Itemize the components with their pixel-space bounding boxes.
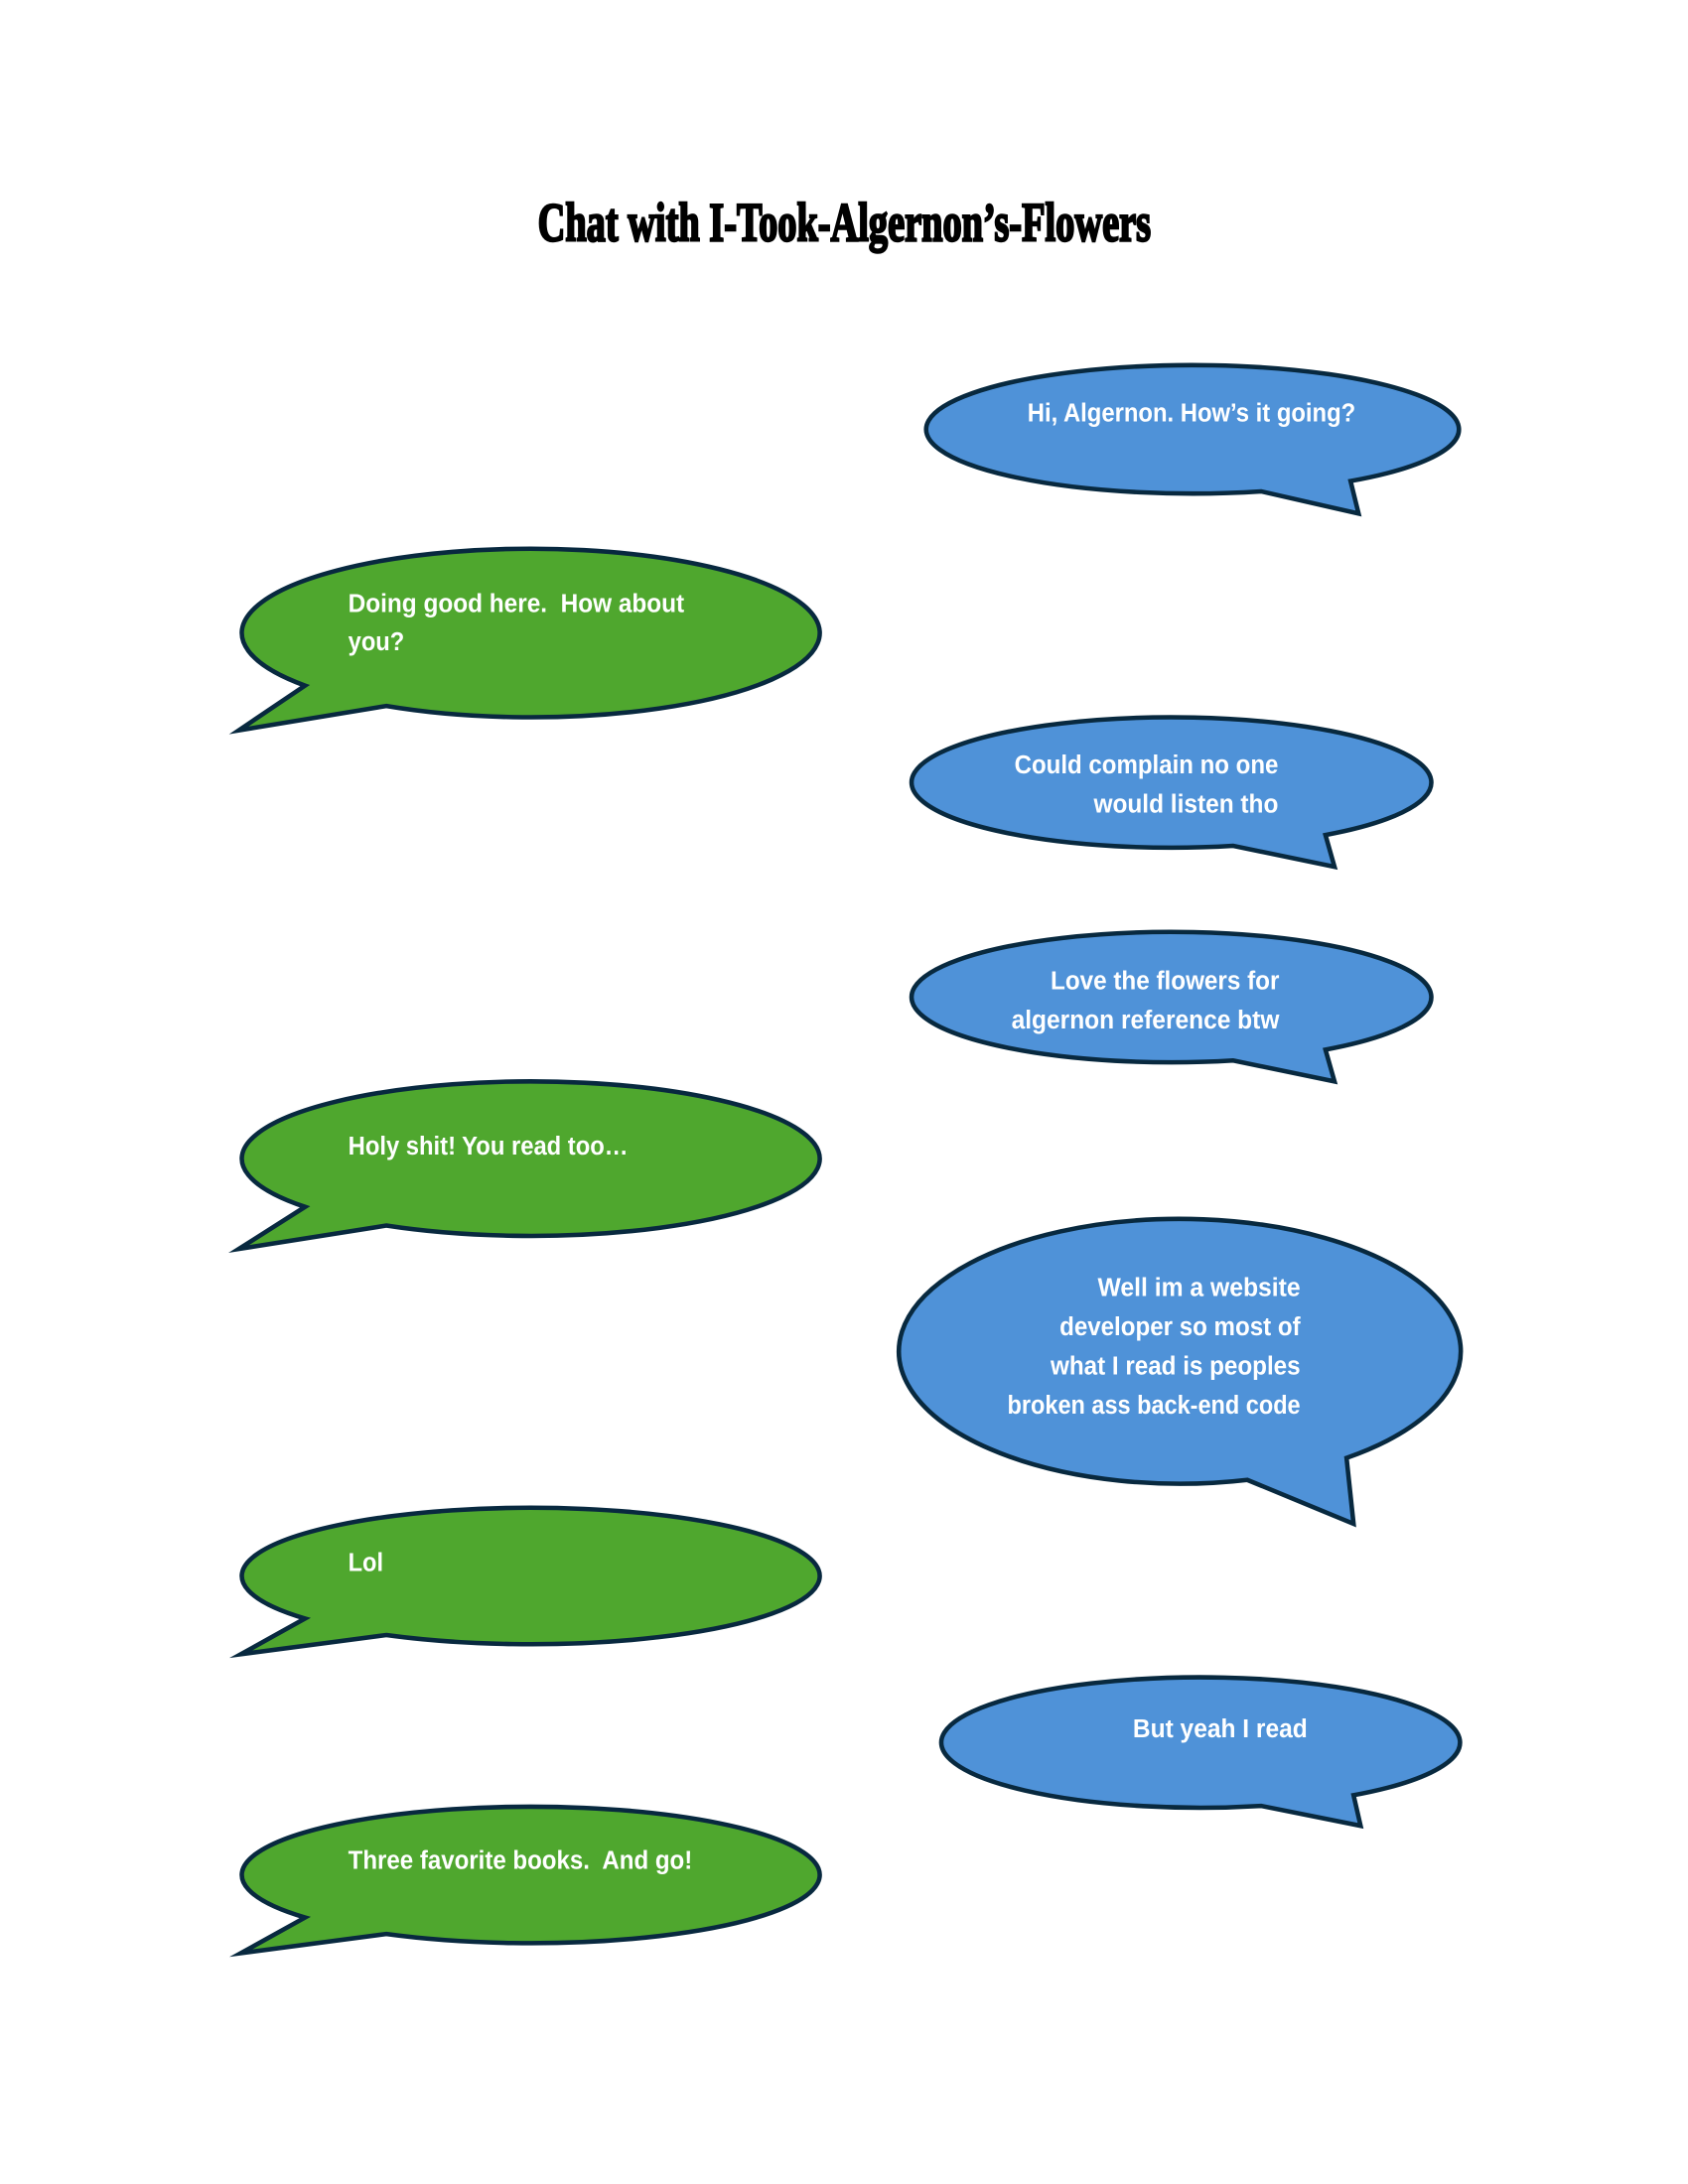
bubble text: Lol bbox=[349, 1549, 383, 1576]
bubble text: Doing good here. How about bbox=[349, 590, 685, 617]
speech bubble: But yeah I read bbox=[941, 1678, 1460, 1826]
bubble shape bbox=[239, 1081, 820, 1249]
bubble shape bbox=[912, 932, 1431, 1081]
speech bubble: Holy shit bbox=[239, 1081, 820, 1249]
bubble text: Three favorite books. And go! bbox=[349, 1847, 692, 1875]
bubble text: Love the flowers for bbox=[1051, 967, 1279, 995]
bubble shape bbox=[912, 718, 1431, 867]
bubble text line 2: developer so most of bbox=[1059, 1313, 1301, 1341]
speech bubble: Three favorite books bbox=[241, 1807, 820, 1953]
bubble shape bbox=[241, 1508, 820, 1654]
bubble text: Hi, Algernon. How’s it going? bbox=[1028, 399, 1355, 427]
bubble text: Well im a website bbox=[1098, 1275, 1301, 1302]
bubble text line 2: algernon reference btw bbox=[1012, 1007, 1280, 1034]
bubble shape bbox=[899, 1219, 1461, 1524]
speech bubble: Love the flowers bbox=[912, 932, 1431, 1081]
bubble shape bbox=[241, 1807, 820, 1953]
bubble shape bbox=[239, 549, 820, 731]
title: Chat with I-Took-Algernon’s-Flowers bbox=[538, 193, 1151, 253]
bubble shape bbox=[941, 1678, 1460, 1826]
speech bubble: Hi, Algernon bbox=[926, 365, 1459, 513]
bubble text: Could complain no one bbox=[1015, 751, 1278, 779]
bubble text line 2: you? bbox=[349, 628, 404, 656]
bubble text: But yeah I read bbox=[1133, 1715, 1308, 1743]
speech bubble: Could complain bbox=[912, 718, 1431, 867]
bubble text line 3: what I read is peoples bbox=[1050, 1352, 1301, 1380]
bubble text line 2: would listen tho bbox=[1093, 791, 1278, 819]
speech bubble: Doing good here bbox=[239, 549, 820, 731]
speech bubble: Lol bbox=[241, 1508, 820, 1654]
speech bubble: website developer bbox=[899, 1219, 1461, 1524]
bubble text line 4: broken ass back-end code bbox=[1008, 1392, 1301, 1420]
bubble shape bbox=[926, 365, 1459, 513]
bubble text: Holy shit! You read too… bbox=[349, 1133, 629, 1160]
